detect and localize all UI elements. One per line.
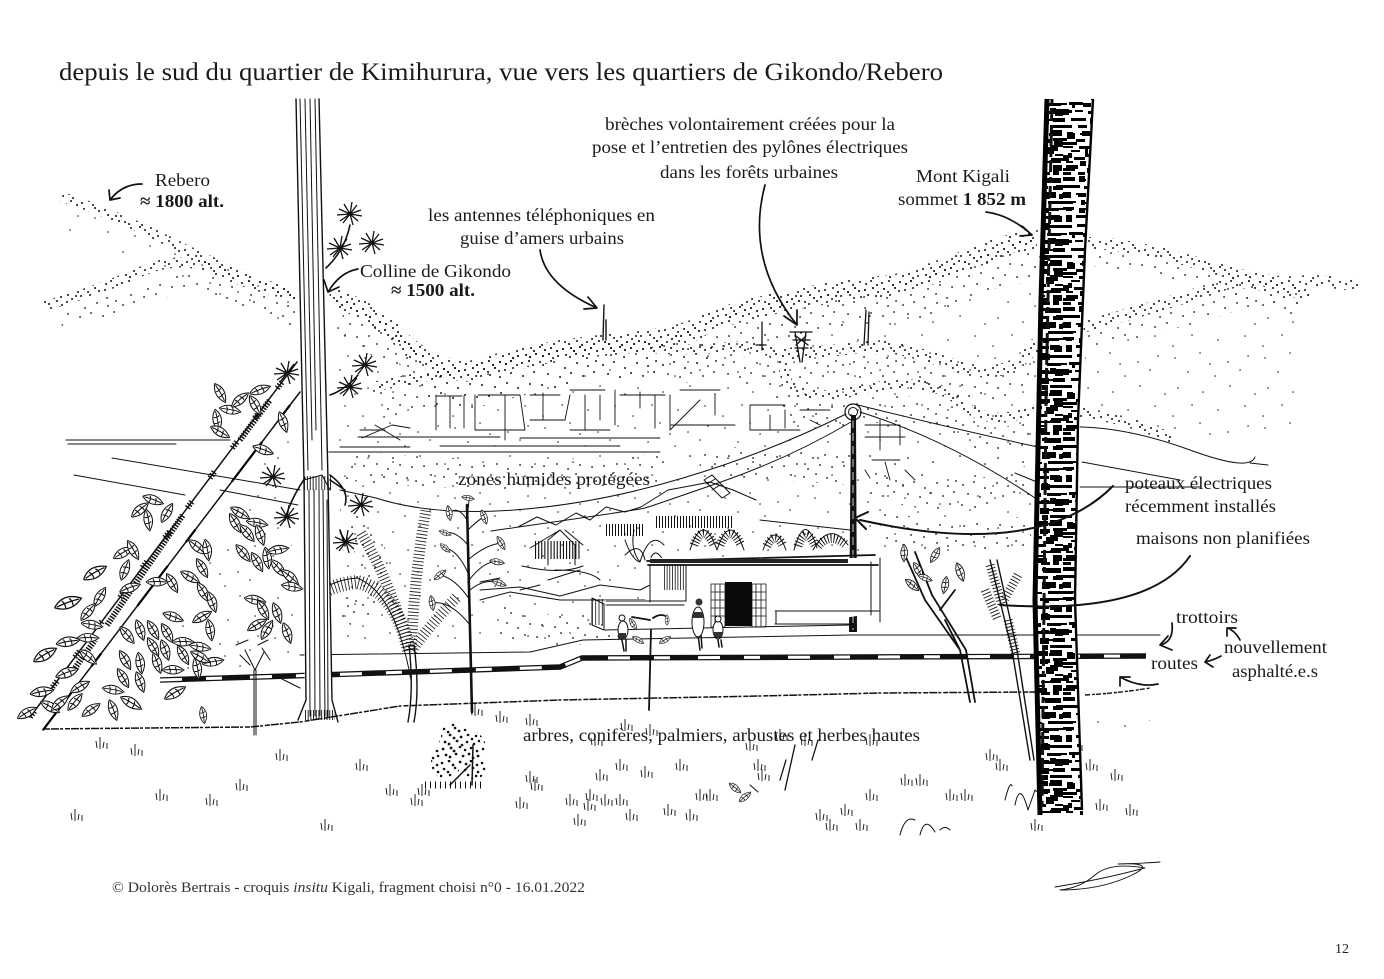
annotation: Mont Kigali [898, 166, 1026, 209]
young tree by trunk [985, 560, 1034, 760]
signature [1055, 862, 1160, 890]
annotation: routes: routes [1151, 653, 1198, 673]
annotation: poteaux [1125, 473, 1276, 516]
page number: 12 [1335, 942, 1349, 957]
electric wires [340, 405, 1180, 531]
annotation: Mont Kigali: Mont Kigali [916, 166, 1010, 186]
antenna [603, 305, 606, 340]
hills: stippled ridgelines [45, 197, 1358, 735]
annotation: maisons: maisons non planifiées [1136, 528, 1310, 548]
hill: Gikondo to Mont Kigali [330, 237, 1358, 394]
birch trunk right [1034, 99, 1094, 815]
tall palm with flowers [428, 494, 508, 712]
bush [425, 722, 488, 785]
arrows [109, 184, 1240, 686]
annotation: antennes: guise d’amers urbains [460, 228, 624, 248]
annotation: antennes [428, 205, 655, 248]
conifer branches [260, 202, 384, 553]
leaning tree [30, 362, 300, 730]
wetland vegetation sketch [480, 475, 850, 600]
annotation: nouvellement asphalté: asphalté.e.s [1232, 661, 1318, 681]
door [725, 582, 752, 626]
annotation: poteaux: poteaux électriques [1125, 473, 1272, 493]
annotation: brèches: brèches volontairement créées pour la [605, 114, 895, 134]
conifer trunk [295, 99, 340, 722]
annotation: brèches: dans les forêts urbaines [660, 162, 838, 182]
title: depuis le sud du quartier de Kimihurura, vue vers les quartiers de Gikondo/Rebero [59, 59, 943, 86]
hill: town slope [372, 346, 1172, 440]
road and pavement [160, 635, 1160, 688]
annotation: nouvellement asphalté [1224, 637, 1327, 681]
pedestrians [618, 598, 723, 651]
ground line and grass [45, 688, 1150, 835]
annotation: poteaux: récemment installés [1125, 496, 1276, 516]
city buildings sketch [325, 390, 915, 480]
hill: Rebero [45, 197, 296, 318]
small tree left [236, 640, 270, 735]
sapling tree near house [628, 614, 672, 710]
door grilles [711, 584, 766, 627]
annotation: Colline de Gikondo: Colline de Gikondo [360, 261, 511, 281]
power pole [845, 404, 861, 632]
annotation: arbres: arbres, conifères, palmiers, arbustes et herbes hautes [523, 725, 920, 745]
annotation: Rebero: ≈ 1800 alt. [140, 191, 224, 211]
annotation: Rebero: Rebero [155, 170, 210, 190]
annotation: antennes: les antennes téléphoniques en [428, 205, 655, 225]
small plant on ground [727, 781, 758, 804]
pylons [756, 310, 869, 362]
annotation: trottoirs: trottoirs [1176, 607, 1238, 627]
annotation: brèches [592, 114, 908, 182]
palm tree [311, 510, 457, 722]
annotation: Colline de Gikondo [360, 261, 511, 300]
house [592, 555, 880, 632]
contour lines [66, 427, 1268, 505]
annotation: nouvellement asphalté: nouvellement [1224, 637, 1327, 657]
annotation: brèches: pose et l’entretien des pylônes électriques [592, 137, 908, 157]
annotation: zones humides: zones humides protégées [458, 469, 650, 489]
leaves of the leaning tree [15, 381, 304, 724]
credit: © Dolorès Bertrais - croquis insitu Kigali, fragment choisi n°0 - 16.01.2022 [112, 880, 585, 896]
annotation: Rebero [140, 170, 224, 211]
tree at right of house [901, 544, 975, 702]
annotation: Colline de Gikondo: ≈ 1500 alt. [391, 280, 475, 300]
annotation: Mont Kigali: sommet 1 852 m [898, 189, 1026, 209]
hill: scattered stipple fields [150, 280, 1300, 735]
